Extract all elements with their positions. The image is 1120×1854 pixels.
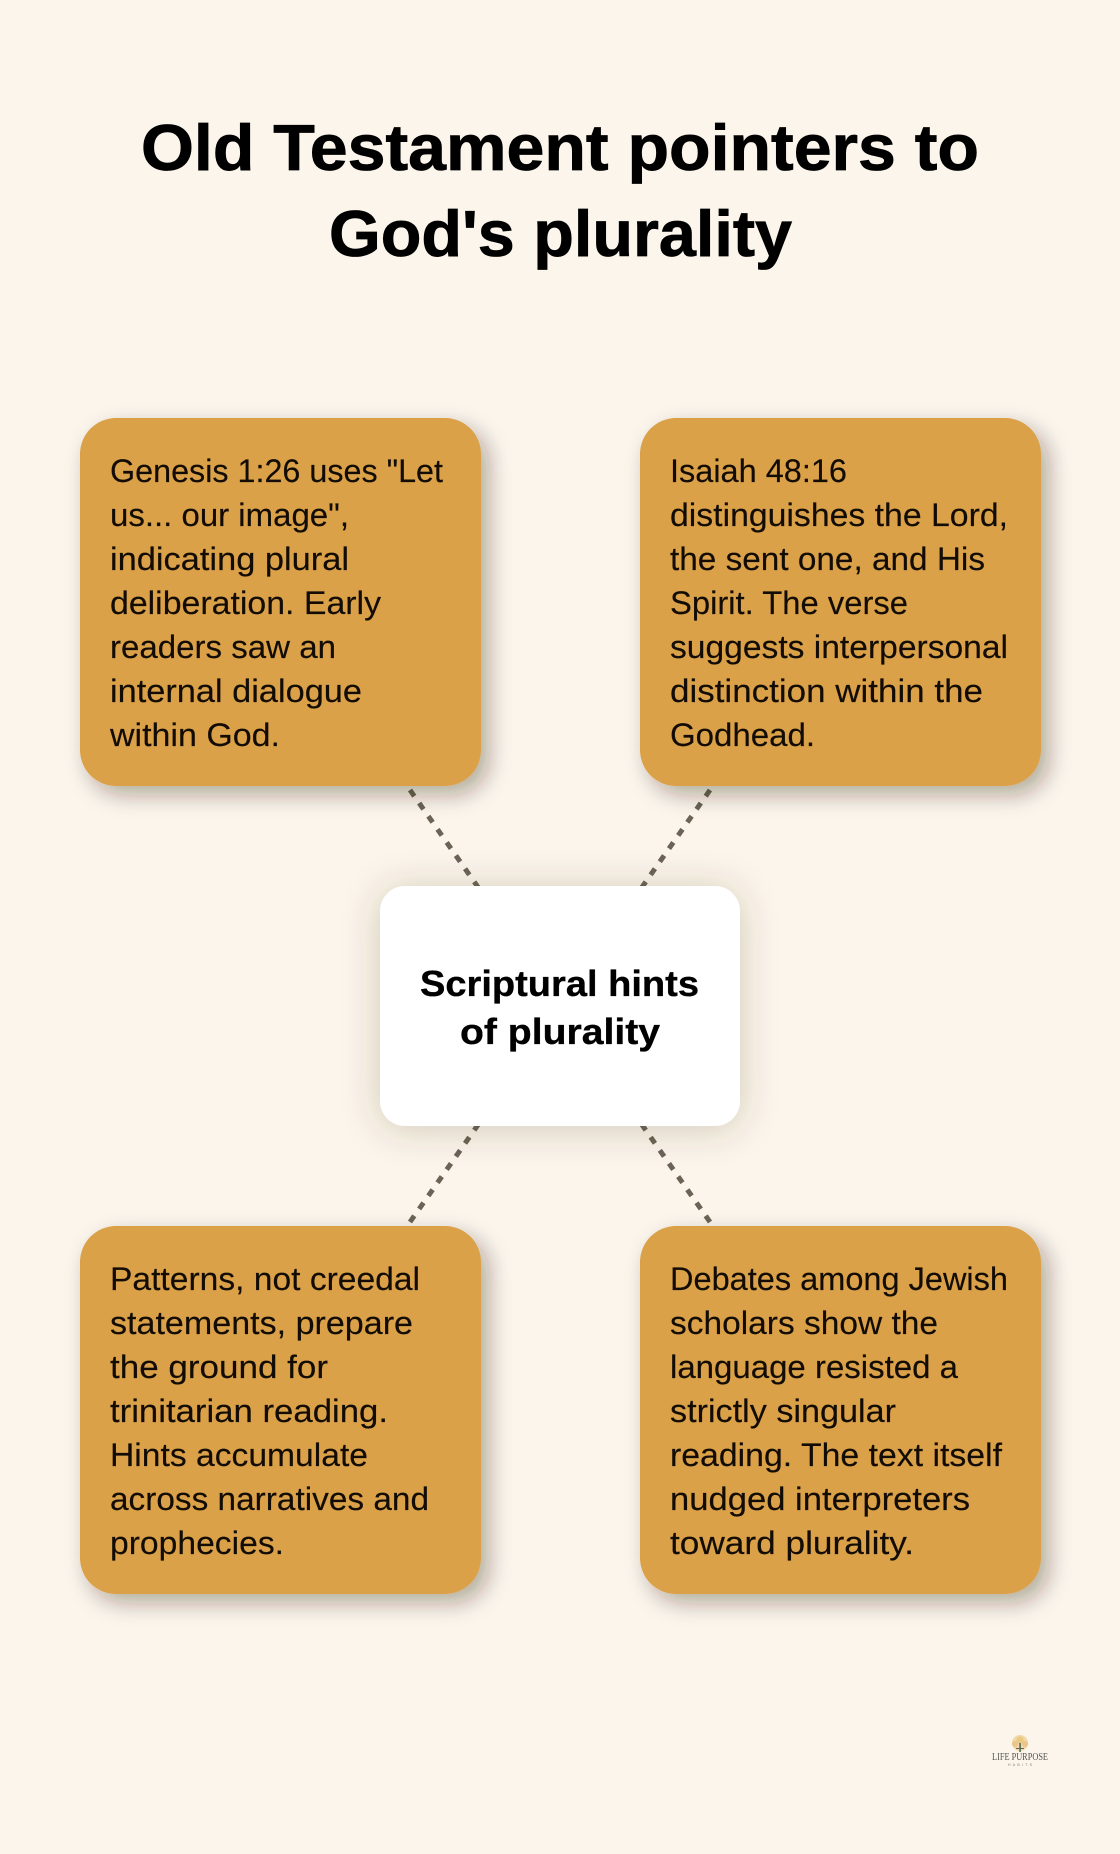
panel: debates bbox=[640, 1226, 1041, 1594]
card text: trinitarian reading. bbox=[110, 1393, 388, 1429]
center card label: of plurality bbox=[460, 1011, 660, 1052]
card text: Hints accumulate bbox=[110, 1437, 368, 1473]
title: Old Testament pointers to bbox=[141, 111, 979, 184]
logo wordmark: LIFE PURPOSE bbox=[992, 1752, 1048, 1763]
card text: distinguishes the Lord, bbox=[670, 497, 1008, 533]
card text: Patterns, not creedal bbox=[110, 1261, 420, 1297]
card background bbox=[640, 1226, 1041, 1594]
card text: strictly singular bbox=[670, 1393, 896, 1429]
card background bbox=[640, 418, 1041, 786]
center card background bbox=[380, 886, 740, 1126]
card text: Godhead. bbox=[670, 717, 815, 753]
card text: scholars show the bbox=[670, 1305, 938, 1341]
icon: tree bbox=[1012, 1735, 1028, 1752]
card text: deliberation. Early bbox=[110, 585, 381, 621]
card text: Isaiah 48:16 bbox=[670, 453, 847, 489]
card text: Debates among Jewish bbox=[670, 1261, 1008, 1297]
card text bbox=[670, 1261, 1008, 1561]
card text: across narratives and bbox=[110, 1481, 429, 1517]
card text: statements, prepare bbox=[110, 1305, 413, 1341]
logo: Life Purpose Habits bbox=[992, 1735, 1048, 1767]
card background bbox=[80, 418, 481, 786]
card text: Spirit. The verse bbox=[670, 585, 908, 621]
connector: top right dashed line bbox=[640, 790, 710, 890]
card text: the ground for bbox=[110, 1349, 328, 1385]
panel: patterns bbox=[80, 1226, 481, 1594]
card text: language resisted a bbox=[670, 1349, 958, 1385]
title: God's plurality bbox=[329, 197, 792, 270]
card text bbox=[109, 453, 443, 753]
connector: top left dashed line bbox=[410, 790, 480, 890]
panel: Isaiah 48:16 bbox=[640, 418, 1041, 786]
card text: indicating plural bbox=[110, 541, 349, 577]
card background bbox=[80, 1226, 481, 1594]
card text: the sent one, and His bbox=[670, 541, 985, 577]
card text: within God. bbox=[109, 717, 280, 753]
panel: Genesis 1:26 bbox=[80, 418, 481, 786]
card text: readers saw an bbox=[110, 629, 336, 665]
card text: us... our image", bbox=[110, 497, 349, 533]
card text: toward plurality. bbox=[670, 1525, 914, 1561]
card text: suggests interpersonal bbox=[670, 629, 1008, 665]
center card label bbox=[420, 963, 699, 1052]
connector: bottom right dashed line bbox=[640, 1122, 710, 1222]
center card label: Scriptural hints bbox=[420, 963, 699, 1004]
card text: prophecies. bbox=[110, 1525, 284, 1561]
card text bbox=[670, 453, 1008, 753]
card text: reading. The text itself bbox=[670, 1437, 1002, 1473]
panel: center node bbox=[380, 886, 740, 1126]
logo subtitle: HABITS bbox=[1008, 1763, 1033, 1767]
card text: Genesis 1:26 uses "Let bbox=[110, 453, 443, 489]
connector: bottom left dashed line bbox=[410, 1122, 480, 1222]
card text: distinction within the bbox=[670, 673, 983, 709]
card text bbox=[110, 1261, 429, 1561]
card text: internal dialogue bbox=[110, 673, 362, 709]
card text: nudged interpreters bbox=[670, 1481, 970, 1517]
title bbox=[141, 111, 979, 270]
